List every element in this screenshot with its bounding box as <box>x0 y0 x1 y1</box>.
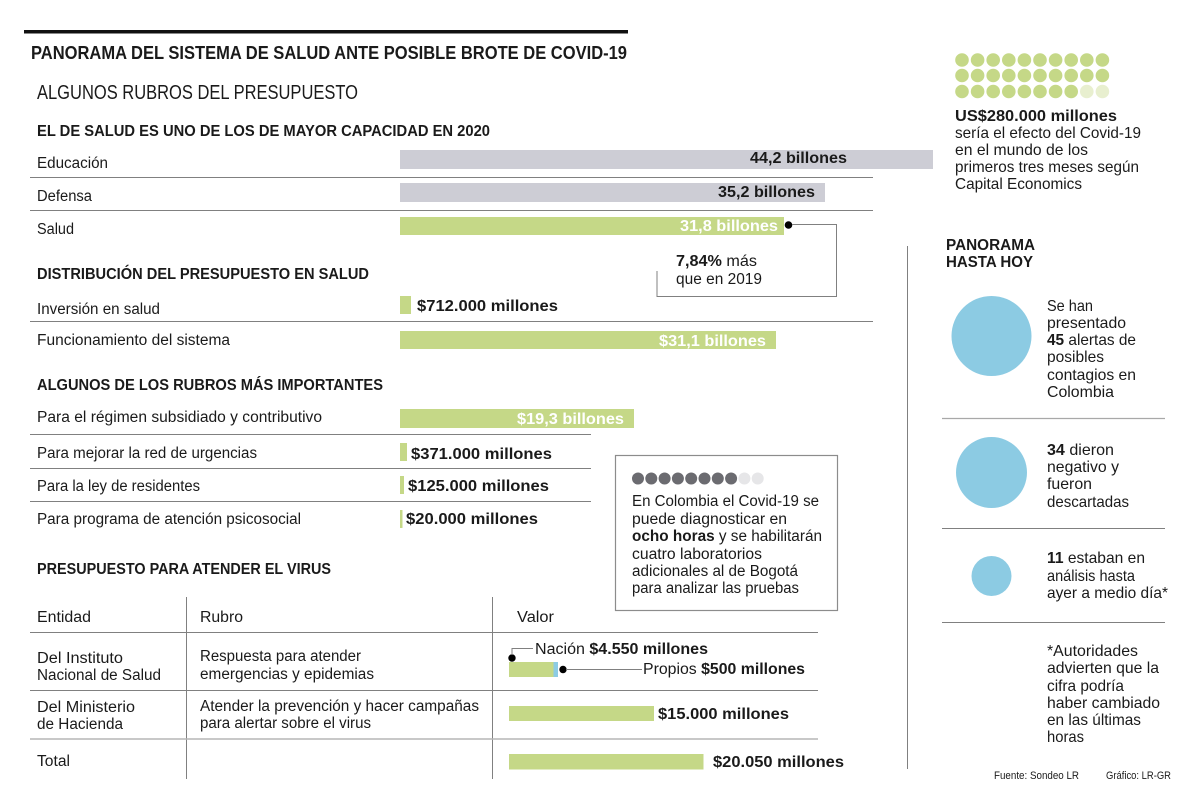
icon: dots <box>632 472 764 484</box>
text: en el mundo de los <box>955 142 1088 159</box>
text: Capital Economics <box>955 176 1082 193</box>
text: cuatro laboratorios <box>632 546 762 563</box>
row: defensa: Defensa <box>37 188 92 205</box>
row: psicosocial <box>37 510 538 528</box>
row: instituto: Propios $500 millones <box>643 661 805 678</box>
row: salud: 31,8 billones <box>680 218 778 235</box>
footnote: horas <box>1047 729 1084 746</box>
item: 34 negativo: negativo y <box>1047 459 1119 476</box>
text: sería el efecto del Covid-19 <box>955 125 1141 142</box>
callout: 7,84%: que en 2019 <box>676 271 762 288</box>
row: ministerio: Del Ministerio <box>37 699 135 716</box>
table header: Entidad <box>37 609 91 626</box>
row: urgencias: $371.000 millones <box>411 446 552 463</box>
row: ministerio: Atender la prevención y hacer campañas <box>200 698 479 715</box>
item: 45 alertas: 45 alertas de <box>1047 332 1136 349</box>
source: Gráfico: LR-GR <box>1106 770 1171 782</box>
text: adicionales al de Bogotá <box>632 563 798 580</box>
row: urgencias: Para mejorar la red de urgencias <box>37 445 257 462</box>
footnote: advierten que la <box>1047 660 1159 677</box>
text: puede diagnosticar en <box>632 511 787 528</box>
row: ministerio: de Hacienda <box>37 716 123 733</box>
row: total: Total <box>37 753 70 770</box>
heading <box>946 237 1035 271</box>
row: defensa <box>37 183 825 205</box>
text: US$280.000 millones <box>955 108 1117 125</box>
item: 11 en análisis: ayer a medio día* <box>1047 585 1168 602</box>
panel: ocho horas <box>616 456 838 610</box>
text <box>632 493 822 597</box>
item: 11 en análisis <box>972 550 1168 602</box>
item: 45 alertas <box>952 296 1136 401</box>
table header: Valor <box>517 609 554 626</box>
panel: presupuesto virus table <box>30 561 844 779</box>
row: régimen <box>37 409 634 428</box>
row: residentes <box>37 476 549 495</box>
row: urgencias <box>37 443 552 463</box>
item: 34 negativo: fueron <box>1047 476 1092 493</box>
table header <box>37 609 554 626</box>
callout: 7,84%: 7,84% más <box>676 253 757 270</box>
item: 34 negativo: descartadas <box>1047 494 1129 511</box>
row: régimen: Para el régimen subsidiado y contributivo <box>37 409 322 426</box>
text: primeros tres meses según <box>955 159 1139 176</box>
text <box>955 108 1141 193</box>
heading: EL DE SALUD ES UNO DE LOS DE MAYOR CAPACIDAD EN 2020 <box>37 123 490 140</box>
row: educación: Educación <box>37 155 108 172</box>
title: PANORAMA DEL SISTEMA DE SALUD ANTE POSIBLE BROTE DE COVID-19 <box>31 43 627 63</box>
item: 45 alertas: posibles <box>1047 349 1104 366</box>
item: 45 alertas: Se han <box>1047 298 1093 315</box>
footnote: en las últimas <box>1047 712 1141 729</box>
row: defensa: 35,2 billones <box>718 184 815 201</box>
item: 45 alertas: contagios en <box>1047 367 1136 384</box>
footnote: haber cambiado <box>1047 695 1160 712</box>
row: residentes: Para la ley de residentes <box>37 478 200 495</box>
text: ocho horas y se habilitarán <box>632 528 822 545</box>
heading: PRESUPUESTO PARA ATENDER EL VIRUS <box>37 561 331 578</box>
row: ministerio <box>37 698 789 733</box>
footnote <box>1047 643 1160 746</box>
row: instituto: Del Instituto <box>37 650 123 667</box>
text: En Colombia el Covid-19 se <box>632 493 819 510</box>
row: instituto <box>37 641 805 684</box>
row: total <box>37 753 844 771</box>
row: inversión: Inversión en salud <box>37 301 160 318</box>
item: 45 alertas: Colombia <box>1047 384 1114 401</box>
row: ministerio: $15.000 millones <box>658 706 789 723</box>
row: total: $20.050 millones <box>713 754 844 771</box>
footnote: cifra podría <box>1047 678 1124 695</box>
row: salud: Salud <box>37 221 74 238</box>
panel: mayor capacidad <box>30 123 933 296</box>
row: instituto: Nacional de Salud <box>37 667 161 684</box>
row: funcionamiento: $31,1 billones <box>659 333 766 350</box>
panel: distribución <box>30 265 873 350</box>
row: psicosocial: $20.000 millones <box>406 511 538 528</box>
heading: HASTA HOY <box>946 254 1033 271</box>
row: psicosocial: Para programa de atención psicosocial <box>37 511 301 528</box>
row: funcionamiento: Funcionamiento del sistema <box>37 332 230 349</box>
heading: PANORAMA <box>946 237 1035 254</box>
icon: dot grid <box>955 53 1109 98</box>
source <box>994 770 1171 782</box>
subtitle: ALGUNOS RUBROS DEL PRESUPUESTO <box>37 82 358 104</box>
heading: ALGUNOS DE LOS RUBROS MÁS IMPORTANTES <box>37 377 383 394</box>
top rule <box>24 30 628 34</box>
row: instituto: Respuesta para atender <box>200 648 361 665</box>
callout: 7,84% <box>657 221 836 296</box>
row: funcionamiento <box>37 331 776 350</box>
row: educación <box>37 150 933 172</box>
panel: efecto mundial <box>955 53 1141 193</box>
row: residentes: $125.000 millones <box>408 478 549 495</box>
row: inversión: $712.000 millones <box>417 298 558 315</box>
row: inversión <box>37 296 558 318</box>
source: Fuente: Sondeo LR <box>994 770 1079 782</box>
row: educación: 44,2 billones <box>750 150 847 167</box>
panel: rubros importantes <box>30 377 634 528</box>
panel: panorama hasta hoy <box>942 237 1168 746</box>
item: 34 negativo <box>956 437 1129 511</box>
row: ministerio: para alertar sobre el virus <box>200 715 371 732</box>
table header: Rubro <box>200 609 243 626</box>
text: para analizar las pruebas <box>632 580 799 597</box>
item: 34 negativo: 34 dieron <box>1047 442 1114 459</box>
item: 11 en análisis: 11 estaban en <box>1047 550 1145 567</box>
heading: DISTRIBUCIÓN DEL PRESUPUESTO EN SALUD <box>37 265 369 283</box>
row: instituto: emergencias y epidemias <box>200 666 374 683</box>
footnote: *Autoridades <box>1047 643 1138 660</box>
row: régimen: $19,3 billones <box>517 411 624 428</box>
row: salud <box>37 217 784 238</box>
item: 11 en análisis: análisis hasta <box>1047 568 1135 585</box>
row: instituto: Nación $4.550 millones <box>535 641 708 658</box>
item: 45 alertas: presentado <box>1047 315 1126 332</box>
